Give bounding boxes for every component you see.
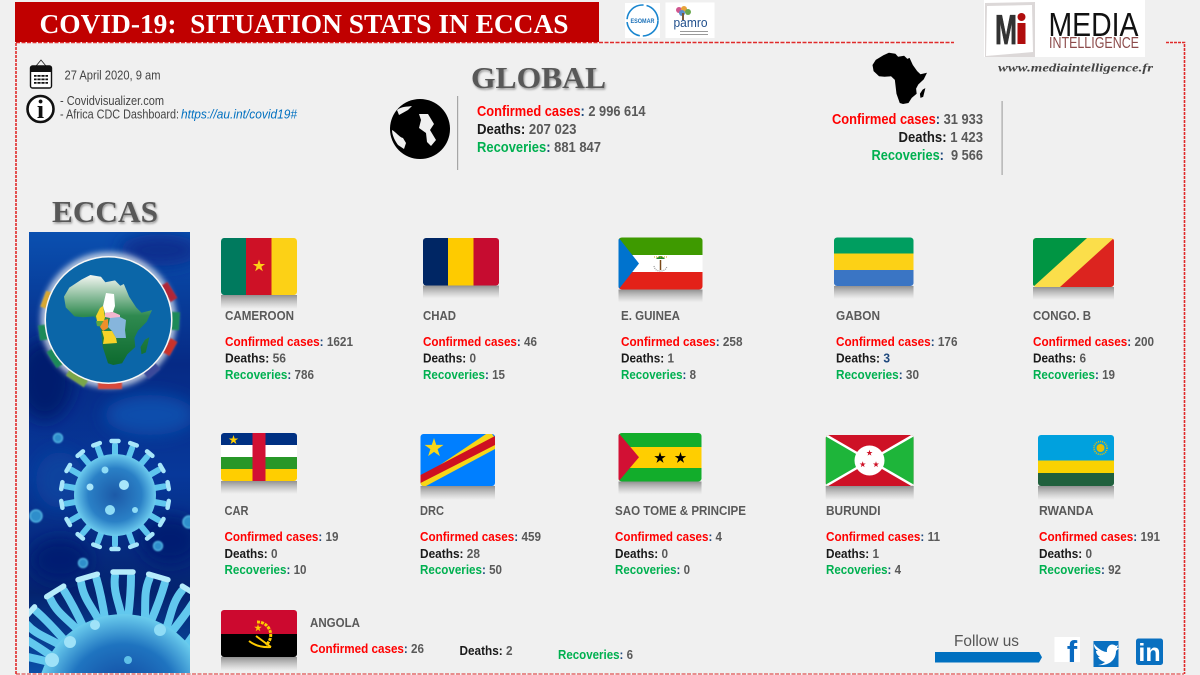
icon: information [28, 95, 54, 124]
global stats [477, 104, 646, 156]
flag: Chad [423, 238, 499, 298]
logo: ESOMAR: ESOMAR [630, 18, 655, 25]
global stats: Recoveries: 881 847 [477, 140, 601, 156]
country: DR Congo: Confirmed cases: 459 [420, 529, 541, 544]
country: Sao Tome and Principe: Deaths: 0 [615, 546, 668, 561]
country: DR Congo: DRC [420, 503, 445, 518]
logo: ESOMAR [625, 3, 660, 38]
country: Gabon [834, 238, 958, 382]
country: Chad: Confirmed cases: 46 [423, 334, 537, 349]
country: Sao Tome and Principe: SAO TOME & PRINCIPE [615, 503, 746, 518]
country: Burundi: BURUNDI [826, 503, 880, 518]
icon: Facebook [1054, 634, 1080, 669]
sources text [60, 93, 298, 122]
country: Burundi [826, 435, 940, 577]
map: member states [96, 293, 126, 344]
country: Congo-Brazzaville: Recoveries: 19 [1033, 367, 1115, 382]
country: Chad [423, 238, 537, 382]
country: Angola: Recoveries: 6 [558, 647, 633, 662]
country: Sao Tome and Principe: Confirmed cases: 4 [615, 529, 723, 544]
country: Burundi: Deaths: 1 [826, 546, 879, 561]
country: Congo-Brazzaville [1033, 238, 1154, 382]
country: Cameroon: CAMEROON [225, 308, 294, 323]
country: DR Congo: Recoveries: 50 [420, 562, 502, 577]
flag: Gabon [834, 238, 914, 299]
country: Sao Tome and Principe: Recoveries: 0 [615, 562, 690, 577]
divider: Africa [1002, 101, 1003, 175]
website url: www.mediaintelligence.fr [998, 60, 1153, 74]
Africa stats: Confirmed cases: 31 933 [832, 112, 983, 128]
logo: Media Intelligence: INTELLIGENCE [1049, 35, 1139, 52]
flag: DRC [420, 434, 495, 500]
heading: ECCAS: ECCAS [52, 194, 158, 229]
country: Burundi: Confirmed cases: 11 [826, 529, 940, 544]
icon: information: i [37, 95, 44, 124]
sources text: - Covidvisualizer.com [60, 93, 164, 108]
icon: Facebook: f [1067, 634, 1078, 669]
icon: calendar [30, 60, 52, 88]
divider: global [457, 96, 458, 170]
country: Rwanda [1038, 435, 1160, 577]
flag: Angola [221, 610, 297, 671]
flag: Equatorial Guinea [618, 238, 702, 302]
country: Equatorial Guinea: Confirmed cases: 258 [621, 334, 742, 349]
country: Central African Republic: Recoveries: 10 [224, 562, 306, 577]
country: DR Congo: Deaths: 28 [420, 546, 480, 561]
logo: Media Intelligence: MEDIA [1048, 6, 1138, 43]
flag: Sao Tome [618, 433, 702, 494]
country: Gabon: Deaths: 3 [836, 350, 890, 366]
global stats: Confirmed cases: 2 996 614 [477, 104, 646, 120]
country: Congo-Brazzaville: Deaths: 6 [1033, 350, 1086, 366]
country: Rwanda: Recoveries: 92 [1039, 562, 1121, 577]
country: Chad: Deaths: 0 [423, 350, 476, 366]
country: Central African Republic: CAR [224, 503, 249, 518]
Africa stats: Deaths: 1 423 [898, 130, 983, 146]
country: Central African Republic: Deaths: 0 [224, 546, 278, 561]
virus: small particles [30, 434, 195, 568]
country: Equatorial Guinea [618, 238, 742, 382]
country: Angola: Deaths: 2 [460, 643, 512, 658]
flag: Rwanda [1038, 435, 1114, 500]
country: Central African Republic [221, 433, 338, 577]
country: Congo-Brazzaville: CONGO. B [1033, 308, 1091, 323]
global stats: Deaths: 207 023 [477, 122, 576, 138]
country: Cameroon: Recoveries: 786 [225, 367, 314, 382]
country: Sao Tome and Principe [615, 433, 746, 577]
heading: GLOBAL: GLOBAL [471, 60, 606, 95]
country: Angola [221, 610, 633, 671]
country: Cameroon: Confirmed cases: 1621 [225, 334, 353, 349]
country: Central African Republic: Confirmed cases: 19 [224, 529, 338, 544]
icon: globe [390, 99, 450, 159]
country: DR Congo [420, 434, 541, 577]
country: Gabon: Recoveries: 30 [836, 367, 919, 382]
virus: large foreground [29, 569, 190, 673]
date text: 27 April 2020, 9 am [64, 68, 160, 82]
follow us label: Follow us [954, 633, 1019, 650]
icon: Twitter [1094, 641, 1119, 667]
country: Chad: Recoveries: 15 [423, 367, 505, 382]
country: Angola: ANGOLA [310, 615, 361, 630]
logo: Media Intelligence [984, 0, 1145, 57]
flag: CAR [221, 433, 297, 494]
country: Equatorial Guinea: Recoveries: 8 [621, 367, 696, 382]
panel: ECCAS emblem and virus image [29, 232, 190, 673]
country: Gabon: GABON [836, 308, 880, 323]
Africa stats [832, 112, 983, 164]
country: Gabon: Confirmed cases: 176 [836, 334, 958, 349]
country: Equatorial Guinea: E. GUINEA [621, 308, 681, 323]
icon: LinkedIn: in [1138, 639, 1161, 667]
icon: Africa map [872, 53, 927, 104]
country: Angola: Confirmed cases: 26 [310, 641, 424, 656]
arrow: follow us [935, 652, 1042, 662]
flag: Cameroon [221, 238, 297, 309]
logo: pamro [666, 2, 714, 38]
virus: medium [61, 441, 169, 549]
country: Equatorial Guinea: Deaths: 1 [621, 350, 674, 366]
country: Cameroon [221, 238, 353, 382]
country: Rwanda: Deaths: 0 [1039, 546, 1092, 561]
emblem: ECCAS seal [40, 252, 176, 388]
country: Chad: CHAD [423, 308, 456, 323]
sources text: - Africa CDC Dashboard: [60, 106, 179, 122]
logo: Media Intelligence: M [995, 6, 1017, 53]
title banner [15, 2, 599, 42]
flag: Burundi [826, 435, 914, 500]
country: Burundi: Recoveries: 4 [826, 562, 902, 577]
title banner: COVID-19: SITUATION STATS IN ECCAS [40, 9, 568, 39]
country: Cameroon: Deaths: 56 [225, 350, 286, 366]
Africa stats: Recoveries: 9 566 [872, 148, 983, 164]
country: Rwanda: Confirmed cases: 191 [1039, 529, 1160, 544]
country: Congo-Brazzaville: Confirmed cases: 200 [1033, 334, 1154, 349]
country: Rwanda: RWANDA [1039, 503, 1094, 518]
sources text: https://au.int/covid19# [181, 106, 298, 122]
flag: Congo [1033, 238, 1114, 300]
logo: pamro: pamro [674, 15, 708, 30]
